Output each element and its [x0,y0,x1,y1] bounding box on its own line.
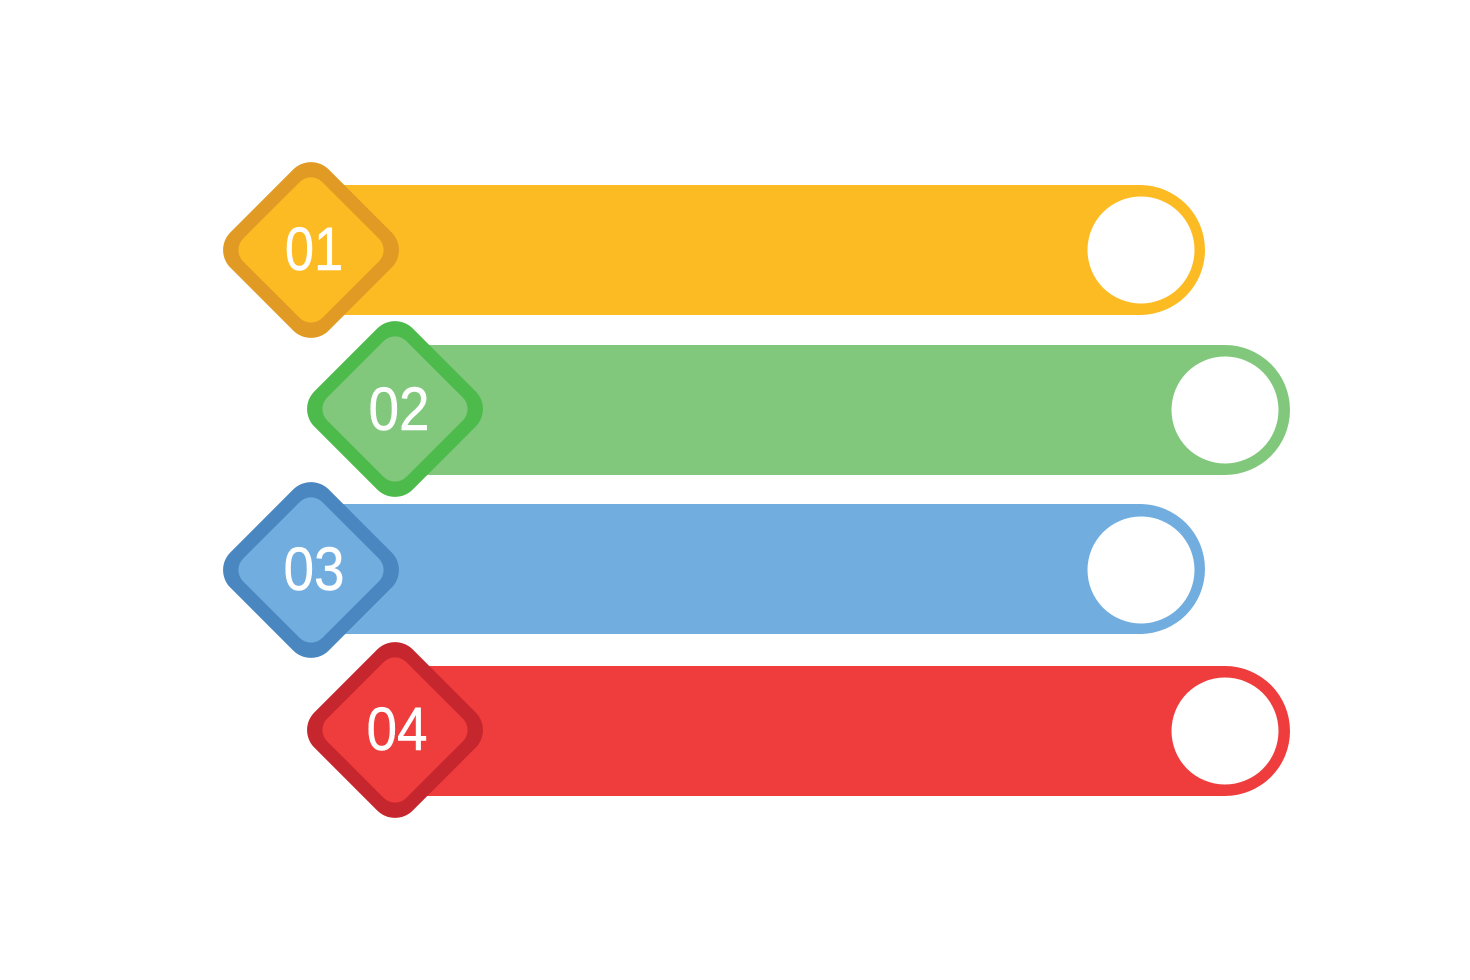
circle 01 [1088,196,1194,304]
diamond 03 inner [232,491,390,649]
diamond 02 inner [316,330,474,488]
bar 01 [311,185,1205,315]
panel: step 01 yellow [213,152,1205,348]
diamond 01 inner [232,171,390,329]
panel: step 04 red [297,632,1290,828]
bar 03 [311,504,1205,634]
bar 02 [395,345,1290,475]
diamond 03 [213,472,409,668]
panel: step 03 blue [213,472,1205,668]
circle 02 [1172,356,1278,464]
number 03: 03 [283,535,345,604]
number 01: 01 [285,215,343,284]
panel: step 02 green [297,311,1290,507]
diamond 02 [297,311,493,507]
diamond 04 inner [316,651,474,809]
number 02: 02 [368,375,430,444]
bar 04 [395,666,1290,796]
diamond 04 [297,632,493,828]
number 04: 04 [366,695,428,764]
diamond 01 [213,152,409,348]
circle 04 [1172,678,1278,784]
circle 03 [1088,516,1194,624]
